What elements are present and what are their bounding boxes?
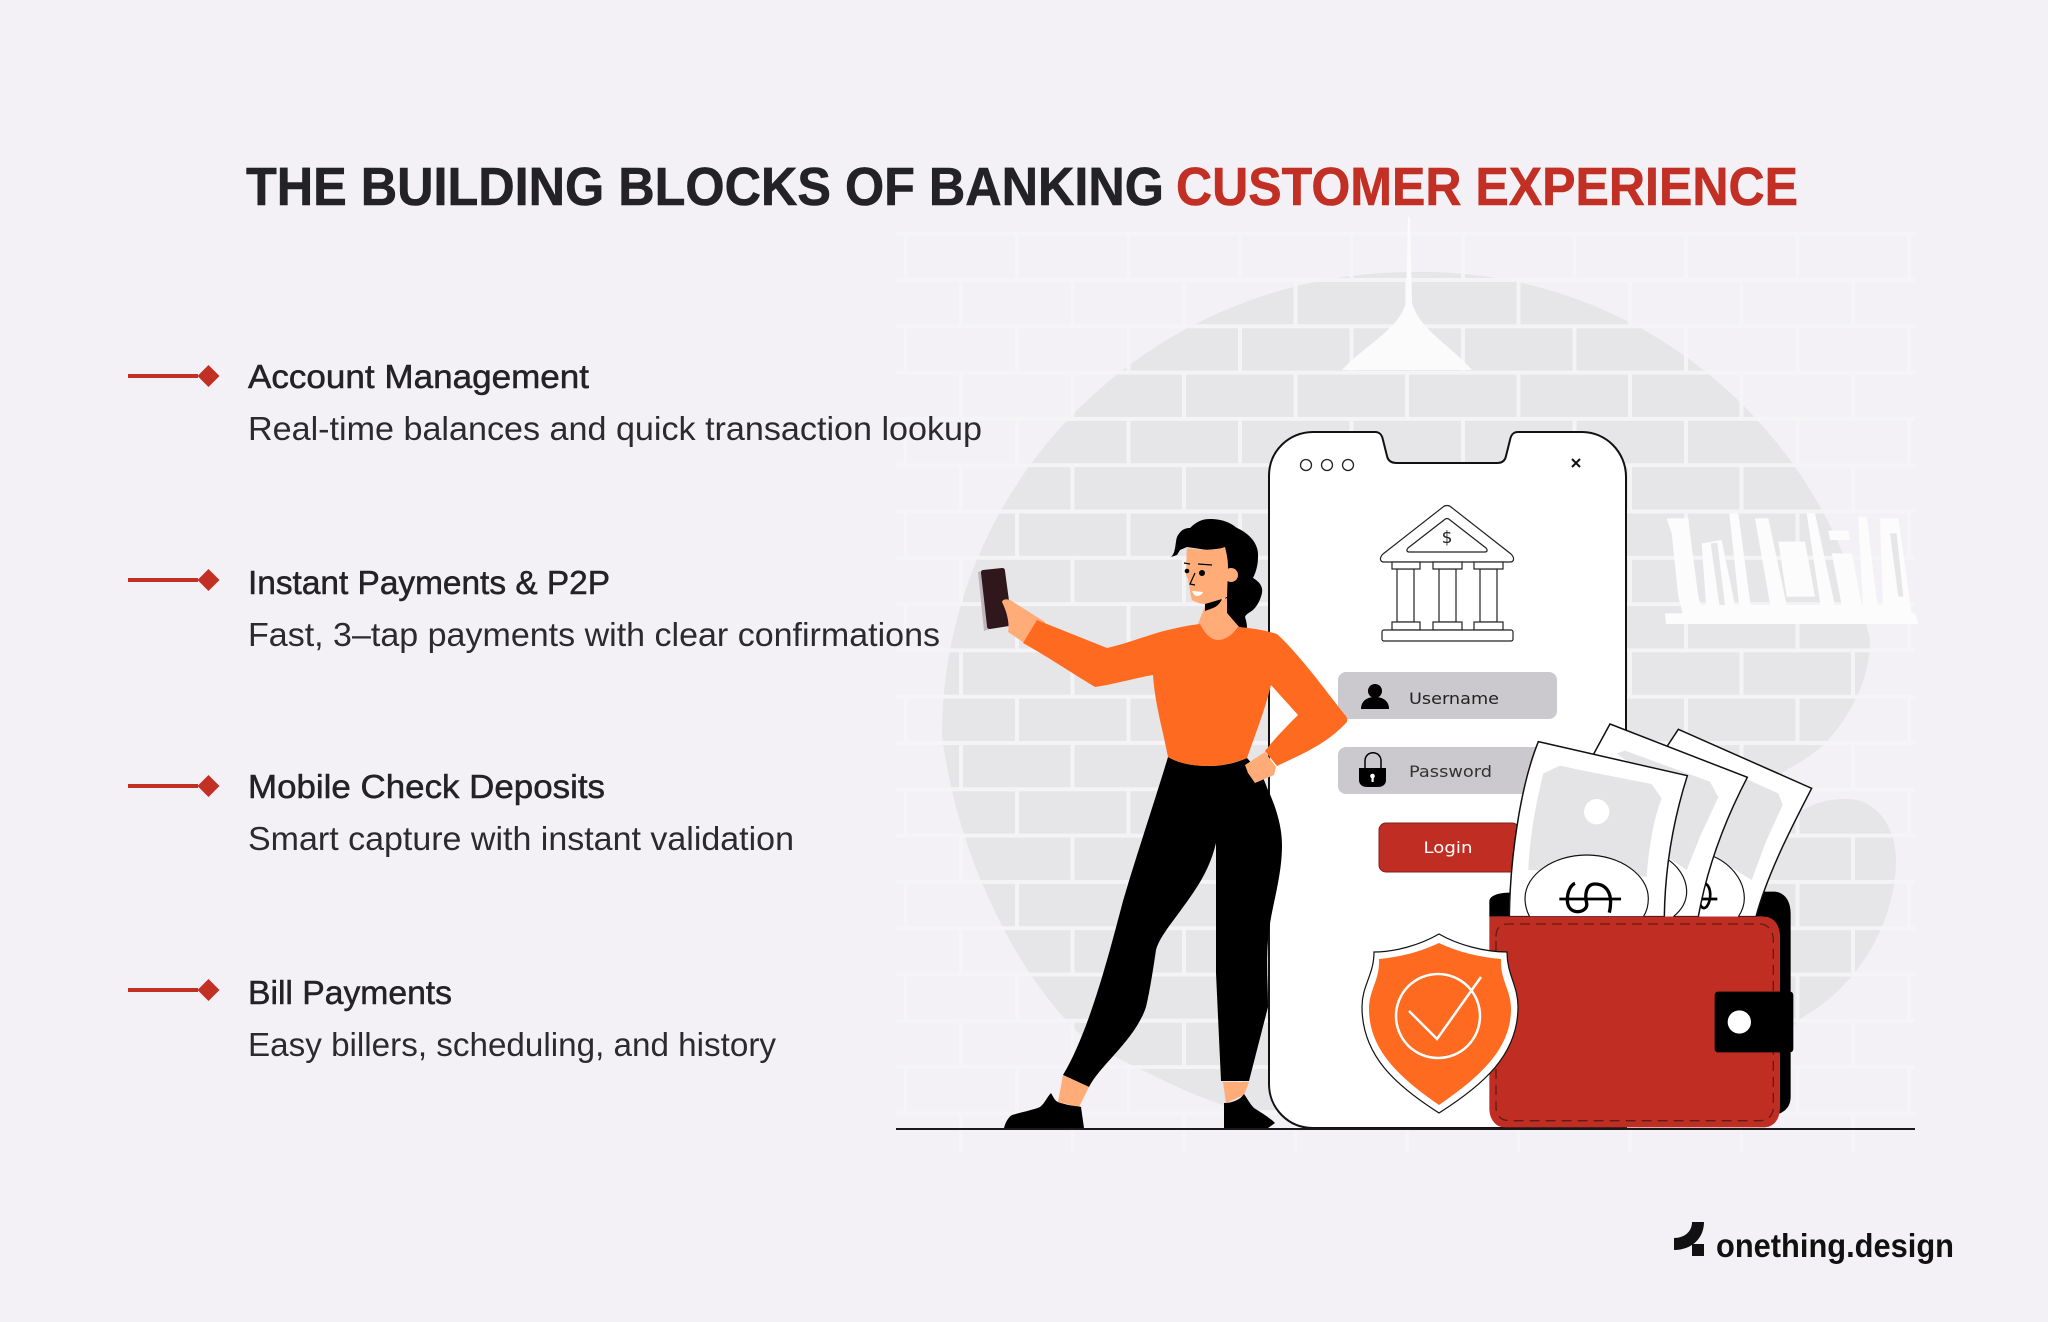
close icon bbox=[1572, 459, 1580, 467]
login button: Login bbox=[1424, 838, 1472, 857]
feature: account management: Real-time balances and quick transaction lookup bbox=[248, 410, 982, 447]
ear bbox=[1224, 568, 1238, 582]
hand bbox=[1002, 599, 1045, 650]
woman holding smartphone bbox=[978, 519, 1347, 1128]
orange sweater bbox=[1023, 620, 1347, 766]
wallet front bbox=[1489, 917, 1780, 1127]
feature: account management: Account Management bbox=[248, 358, 589, 395]
banknote: back bbox=[1647, 729, 1812, 917]
username field: Username bbox=[1409, 689, 1499, 708]
bookshelf bbox=[1665, 513, 1918, 624]
window dots bbox=[1300, 460, 1354, 470]
ankles bbox=[1058, 1075, 1249, 1107]
feature: mobile check deposits bbox=[128, 768, 794, 857]
phone login screen bbox=[1269, 432, 1626, 1128]
wallet with cash bbox=[1489, 724, 1812, 1127]
feature: account management bbox=[128, 358, 982, 447]
title: THE BUILDING BLOCKS OF BANKING bbox=[246, 157, 1164, 217]
feature: bill payments bbox=[128, 974, 776, 1063]
hip hand bbox=[1245, 752, 1276, 783]
feature: instant payments: Fast, 3–tap payments with clear confirmations bbox=[248, 616, 940, 653]
feature: mobile check deposits: Smart capture with instant validation bbox=[248, 820, 794, 857]
logo: onething.design: onething.design bbox=[1716, 1227, 1954, 1264]
ground line bbox=[896, 1128, 1915, 1130]
icon: bank building: $ bbox=[1442, 528, 1452, 548]
shoes bbox=[1004, 1093, 1275, 1128]
feature: bill payments: Bill Payments bbox=[248, 974, 452, 1011]
held phone bbox=[978, 568, 1012, 631]
background brick wall bbox=[896, 232, 1915, 1152]
logo mark bbox=[1674, 1222, 1704, 1256]
login button bbox=[1379, 823, 1519, 872]
hair bbox=[1171, 519, 1262, 628]
feature: instant payments: Instant Payments & P2P bbox=[248, 564, 610, 601]
neck bbox=[1198, 598, 1240, 650]
clasp button bbox=[1728, 1010, 1751, 1034]
title bbox=[246, 157, 1798, 217]
stitching bbox=[1496, 924, 1773, 1121]
banknote: middle bbox=[1594, 724, 1747, 917]
trousers bbox=[1063, 757, 1282, 1087]
clasp bbox=[1715, 992, 1793, 1052]
banknote: front bbox=[1509, 742, 1687, 917]
hanging lamp bbox=[1342, 217, 1472, 370]
password field: Password bbox=[1409, 762, 1492, 781]
feature: instant payments bbox=[128, 564, 940, 653]
username field bbox=[1338, 672, 1557, 719]
wallet back bbox=[1489, 892, 1791, 1114]
title: CUSTOMER EXPERIENCE bbox=[1176, 157, 1798, 217]
feature: bill payments: Easy billers, scheduling, and history bbox=[248, 1026, 776, 1063]
password field bbox=[1338, 747, 1557, 794]
icon: bank building bbox=[1380, 506, 1514, 641]
feature: mobile check deposits: Mobile Check Deposits bbox=[248, 768, 605, 805]
icon: security shield bbox=[1362, 934, 1518, 1113]
neck shadow bbox=[1205, 599, 1222, 611]
facial features bbox=[1184, 563, 1212, 596]
face bbox=[1186, 547, 1228, 604]
